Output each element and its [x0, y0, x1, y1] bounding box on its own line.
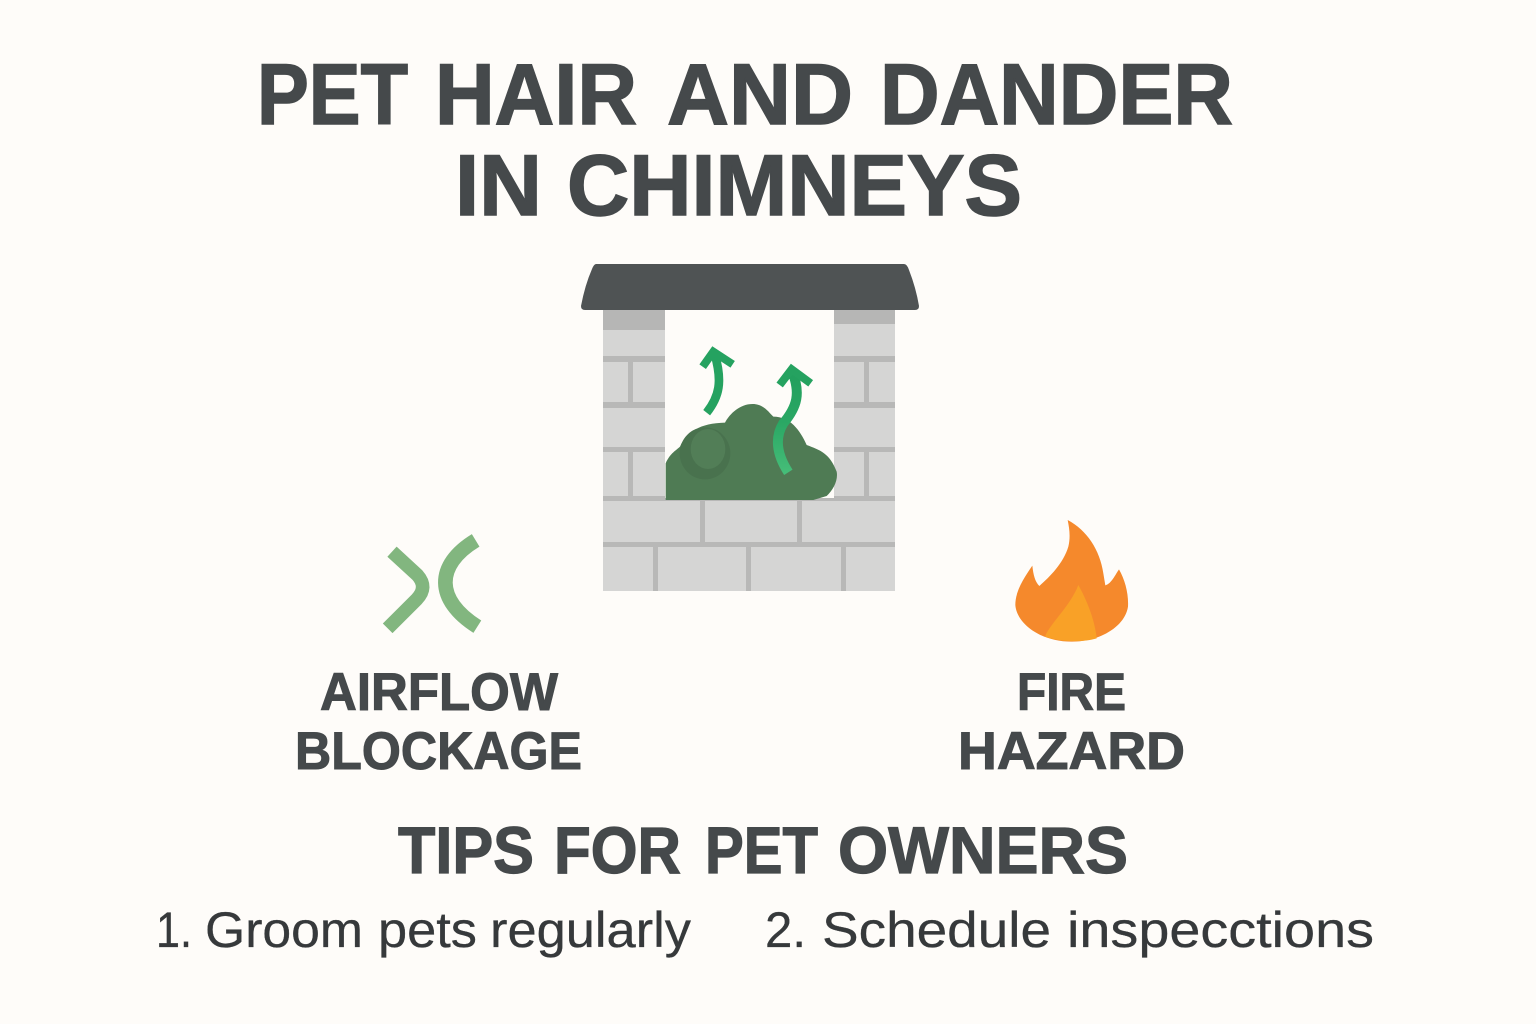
heading: tips for pet owners: FOR — [554, 813, 681, 887]
label: fire hazard: FIRE — [1017, 663, 1126, 722]
title — [257, 47, 1233, 234]
heading: tips for pet owners: PET — [705, 813, 818, 887]
tip 1: Groom — [205, 902, 363, 958]
label: airflow blockage: AIRFLOW — [320, 663, 558, 722]
title: HAIR — [435, 47, 637, 143]
icon: airflow blockage — [388, 540, 477, 628]
label: fire hazard: HAZARD — [958, 722, 1185, 781]
heading: tips for pet owners: OWNERS — [838, 813, 1128, 887]
tip 2: Schedule — [822, 902, 1051, 958]
tip 1: pets — [378, 902, 477, 958]
chimney brick body — [603, 310, 895, 591]
heading: tips for pet owners — [398, 813, 1128, 887]
title: IN — [455, 138, 542, 234]
tip 1: regularly — [490, 902, 691, 958]
heading: tips for pet owners: TIPS — [398, 813, 534, 887]
tip 1: 1. — [156, 902, 192, 958]
tip 2: 2. — [765, 902, 806, 958]
arrow: left rising dander — [703, 352, 733, 413]
chimney roof cap — [581, 264, 919, 310]
tip 2 — [765, 902, 1374, 958]
icon: chimney with pet hair pile — [581, 264, 919, 591]
title: CHIMNEYS — [567, 138, 1022, 234]
label: airflow blockage — [295, 663, 582, 781]
tip 1 — [156, 902, 691, 958]
title: DANDER — [880, 47, 1233, 143]
label: airflow blockage: BLOCKAGE — [295, 722, 582, 781]
title: AND — [667, 47, 853, 143]
label: fire hazard — [958, 663, 1185, 781]
pet hair pile — [666, 404, 837, 500]
arrow: right rising dander — [778, 369, 811, 472]
icon: flame — [1015, 520, 1128, 642]
tip 2: inspecctions — [1067, 902, 1374, 958]
title: PET — [257, 47, 408, 143]
